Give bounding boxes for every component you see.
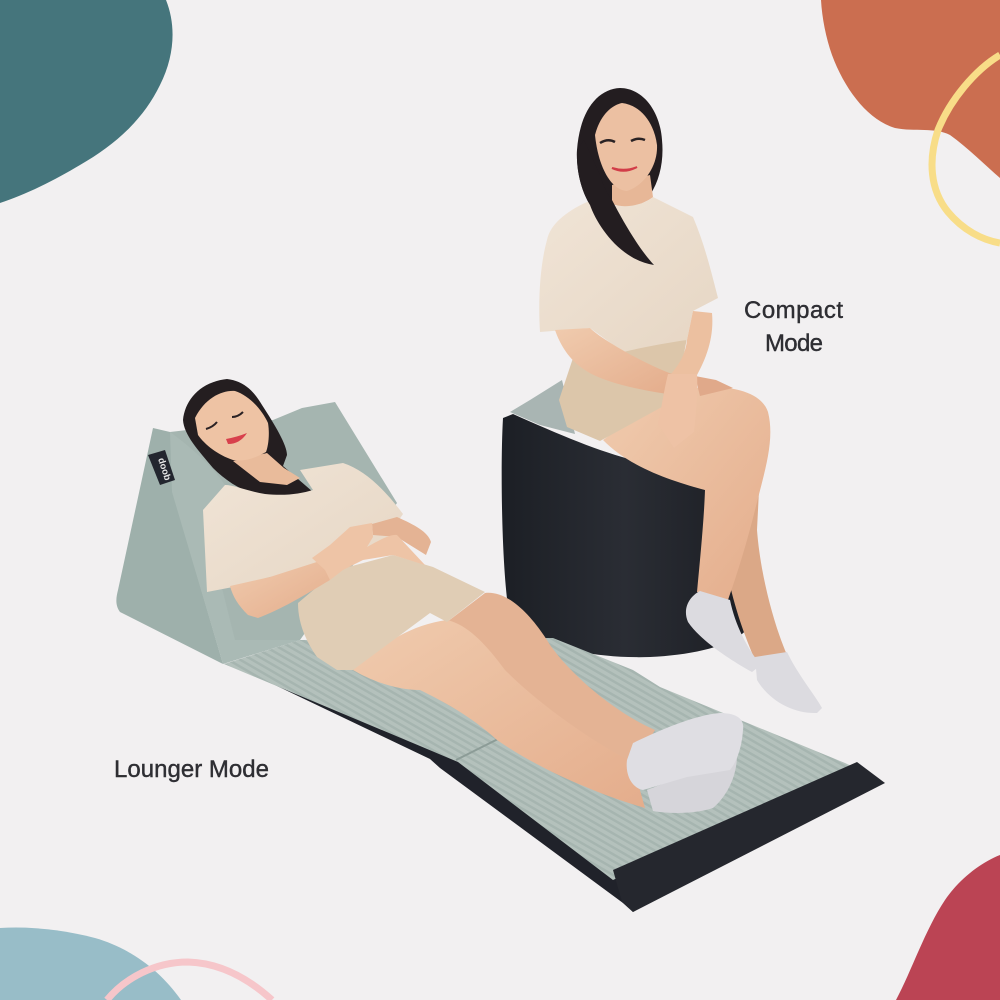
- mouth: [612, 167, 637, 171]
- blob: light blue bottom left: [0, 927, 181, 1000]
- face: [595, 103, 657, 191]
- mat fold: [456, 737, 502, 760]
- illustration: compact mode woman: [539, 88, 822, 713]
- shorts: [559, 338, 695, 441]
- wedge side: [116, 428, 223, 664]
- near leg: [603, 387, 770, 600]
- far leg: [447, 593, 655, 770]
- label: lounger mode: Lounger Mode: [114, 756, 269, 783]
- illustration: compact mode bean bag: [502, 380, 748, 657]
- near leg: [353, 620, 645, 808]
- icon: yellow ring top right: [932, 55, 1000, 243]
- blob: teal top left: [0, 0, 173, 203]
- tee: [539, 197, 718, 352]
- near arm: [230, 560, 330, 618]
- socks: [686, 591, 761, 672]
- mouth: [226, 433, 247, 444]
- mat surface: [224, 638, 860, 880]
- left arm: [555, 328, 672, 394]
- label tag: doob: [155, 457, 173, 482]
- back pillow: [170, 402, 397, 663]
- back hair: [577, 88, 662, 205]
- icon: pink ring bottom left: [107, 962, 272, 1000]
- neck: [233, 453, 300, 485]
- blob: orange top right: [821, 0, 1000, 178]
- hands: [312, 523, 425, 580]
- socks: [647, 755, 737, 813]
- black underside: [233, 665, 660, 912]
- hair: [183, 379, 313, 496]
- neck: [612, 175, 653, 206]
- shorts: [298, 555, 485, 670]
- hair strand: [577, 140, 654, 265]
- label: compact: Compact: [744, 297, 843, 324]
- back arm: [372, 517, 431, 555]
- illustration: lounger mode woman: [183, 379, 743, 813]
- face: [195, 391, 269, 461]
- label tag: [148, 450, 175, 485]
- wedge front panel: [170, 432, 300, 664]
- tee: [203, 463, 403, 592]
- blob: red bottom right: [896, 855, 1000, 1000]
- black end band: [613, 762, 885, 912]
- far leg: [722, 470, 787, 660]
- label: mode: Mode: [765, 330, 823, 357]
- right arm: [670, 311, 712, 375]
- back hand: [695, 376, 733, 396]
- front hand: [658, 374, 697, 448]
- illustration: lounger mode mat: [116, 402, 885, 912]
